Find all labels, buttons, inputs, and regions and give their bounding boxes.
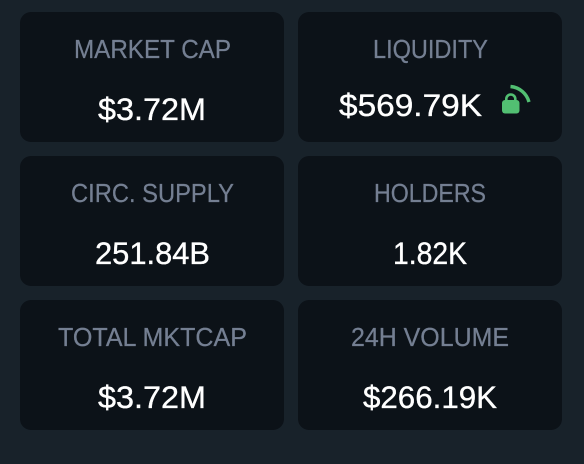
panel: circ supply	[20, 156, 284, 286]
panel: holders	[298, 156, 562, 286]
value: circ supply: 251.84B	[95, 235, 210, 271]
label: holders: HOLDERS	[374, 180, 486, 208]
panel: total mktcap	[20, 300, 284, 430]
label: 24h volume: 24H VOLUME	[351, 324, 509, 352]
value: total mktcap: $3.72M	[98, 379, 206, 415]
label: market cap: MARKET CAP	[74, 36, 231, 64]
label: total mktcap: TOTAL MKTCAP	[58, 324, 247, 352]
panel: 24h volume	[298, 300, 562, 430]
panel: market cap	[20, 12, 284, 142]
label: circ supply: CIRC. SUPPLY	[71, 180, 234, 208]
value: liquidity: $569.79K	[339, 87, 482, 123]
value: market cap: $3.72M	[98, 91, 206, 127]
label: liquidity: LIQUIDITY	[373, 36, 488, 64]
value: holders: 1.82K	[393, 235, 467, 271]
icon: green lock with arc	[502, 86, 529, 114]
value: 24h volume: $266.19K	[363, 379, 497, 415]
panel: liquidity	[298, 12, 562, 142]
